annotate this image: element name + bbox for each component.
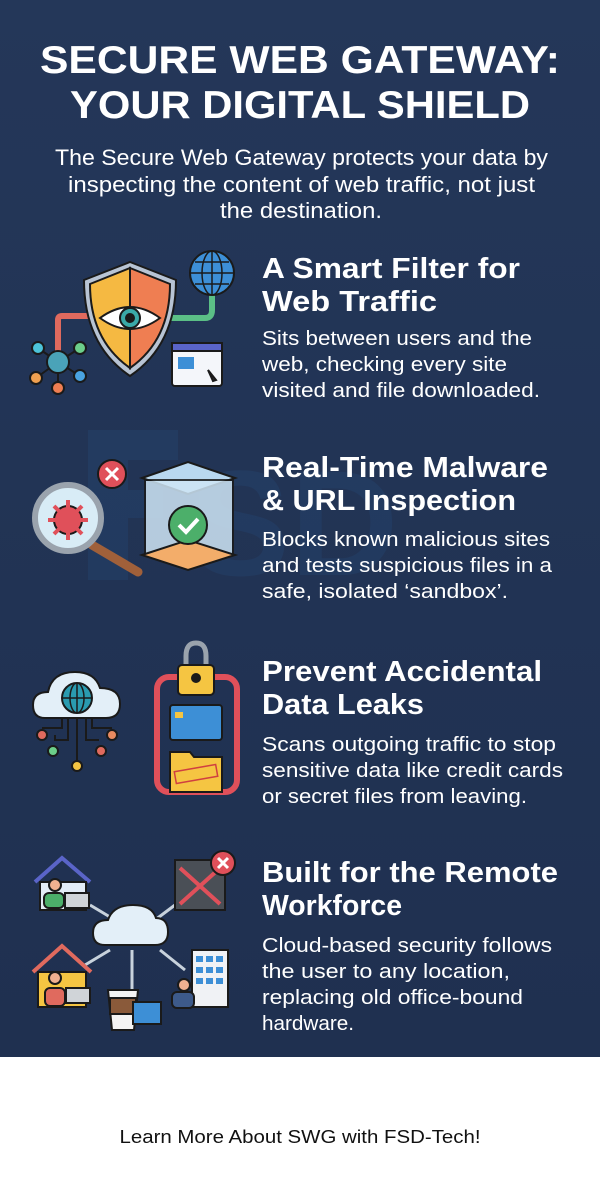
- icon: shield with eye: [30, 251, 234, 394]
- subtitle: the destination.: [220, 198, 382, 223]
- heading: Data Leaks: [262, 689, 424, 721]
- watermark: SD: [190, 439, 398, 607]
- heading: [262, 452, 548, 517]
- body text: Scans outgoing traffic to stop: [262, 734, 556, 756]
- section 2: malware inspection: [35, 452, 553, 603]
- title: [40, 39, 560, 127]
- body text: web, checking every site: [261, 354, 507, 376]
- section 1: smart filter: [30, 251, 540, 402]
- title: SECURE WEB GATEWAY:: [40, 39, 560, 82]
- title: YOUR DIGITAL SHIELD: [70, 84, 530, 127]
- body text: visited and file downloaded.: [262, 380, 540, 402]
- subtitle: [55, 145, 548, 223]
- body text: [261, 328, 540, 402]
- heading: A Smart Filter for: [262, 253, 520, 285]
- body text: safe, isolated ‘sandbox’.: [262, 581, 508, 603]
- heading: [262, 253, 520, 318]
- icon: magnifier and sandbox: [35, 460, 235, 572]
- subtitle: inspecting the content of web traffic, not just: [68, 172, 535, 197]
- body text: Cloud-based security follows: [262, 935, 552, 957]
- icon: cloud network with remote locations: [33, 851, 235, 1030]
- body text: the user to any location,: [262, 961, 510, 983]
- body text: Sits between users and the: [262, 328, 532, 350]
- heading: Web Traffic: [262, 286, 437, 318]
- icon: cloud circuit and locked clipboard: [33, 643, 237, 792]
- watermark: [88, 430, 398, 607]
- body text: and tests suspicious files in a: [262, 555, 553, 577]
- heading: Prevent Accidental: [262, 656, 542, 688]
- section 3: data leaks: [33, 643, 563, 808]
- heading: [262, 656, 542, 721]
- body text: [262, 935, 552, 1035]
- heading: Built for the Remote: [262, 857, 558, 889]
- heading: & URL Inspection: [262, 485, 516, 517]
- body text: replacing old office-bound: [262, 987, 523, 1009]
- body text: or secret files from leaving.: [262, 786, 527, 808]
- footer link text: Learn More About SWG with FSD-Tech!: [120, 1127, 480, 1147]
- body text: hardware.: [262, 1013, 354, 1035]
- section 4: remote workforce: [33, 851, 558, 1035]
- heading: Workforce: [262, 890, 402, 922]
- body text: [262, 529, 553, 603]
- body text: sensitive data like credit cards: [262, 760, 563, 782]
- body text: [262, 734, 563, 808]
- heading: Real-Time Malware: [262, 452, 548, 484]
- heading: [262, 857, 558, 922]
- subtitle: The Secure Web Gateway protects your data by: [55, 145, 548, 170]
- body text: Blocks known malicious sites: [262, 529, 550, 551]
